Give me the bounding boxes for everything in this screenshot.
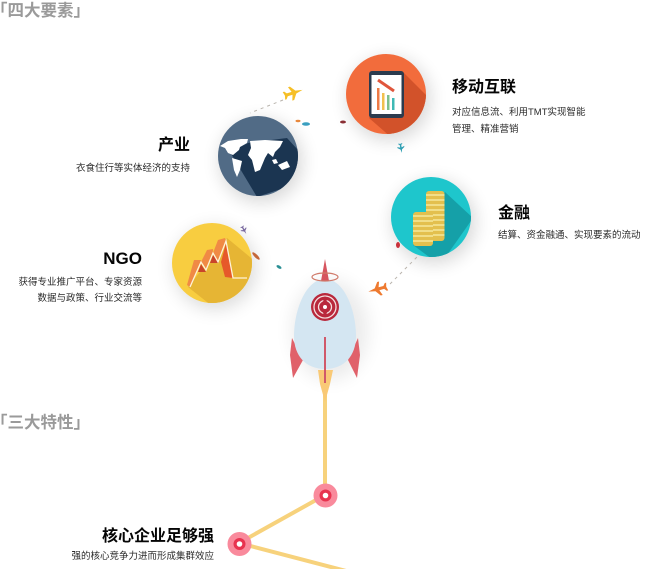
node: upper trail junction xyxy=(314,484,338,508)
icon: small teal plane xyxy=(397,143,405,154)
text: mobile internet: 移动互联 xyxy=(452,77,516,96)
text: NGO xyxy=(18,249,142,304)
icon: rocket xyxy=(290,259,368,402)
arrow: yellow rocket trail xyxy=(239,378,350,569)
text: finance: 金融 xyxy=(498,203,530,222)
text: industry: 衣食住行等实体经济的支持 xyxy=(76,162,190,174)
text: industry xyxy=(76,136,190,174)
text: mobile internet: 对应信息流、利用TMT实现智能 xyxy=(452,106,586,118)
small floating decorations xyxy=(251,120,400,270)
text: mobile internet xyxy=(452,77,586,135)
text: NGO: 获得专业推广平台、专家资源 xyxy=(18,276,142,288)
text: finance: 结算、资金融通、实现要素的流动 xyxy=(498,229,641,241)
icon: orange plane with dashed trail xyxy=(367,257,417,298)
text: mobile internet: 管理、精准营销 xyxy=(452,123,519,135)
icon: industry globe xyxy=(218,116,302,202)
text: industry: 产业 xyxy=(158,136,190,154)
icon: NGO yellow circle xyxy=(172,223,256,309)
icon: finance teal circle xyxy=(391,177,475,265)
text: NGO: 数据与政策、行业交流等 xyxy=(37,292,142,304)
text: finance xyxy=(498,203,641,241)
text: NGO: NGO xyxy=(103,249,142,268)
icon: small purple plane xyxy=(239,225,249,235)
text: core enterprise: 强的核心竞争力进而形成集群效应 xyxy=(71,550,214,562)
text: core enterprise xyxy=(71,526,214,562)
icon: yellow plane with dashed trail xyxy=(250,83,305,113)
node: core enterprise junction xyxy=(228,532,252,556)
text: core enterprise: 核心企业足够强 xyxy=(102,526,214,545)
icon: mobile internet orange circle xyxy=(346,54,440,145)
